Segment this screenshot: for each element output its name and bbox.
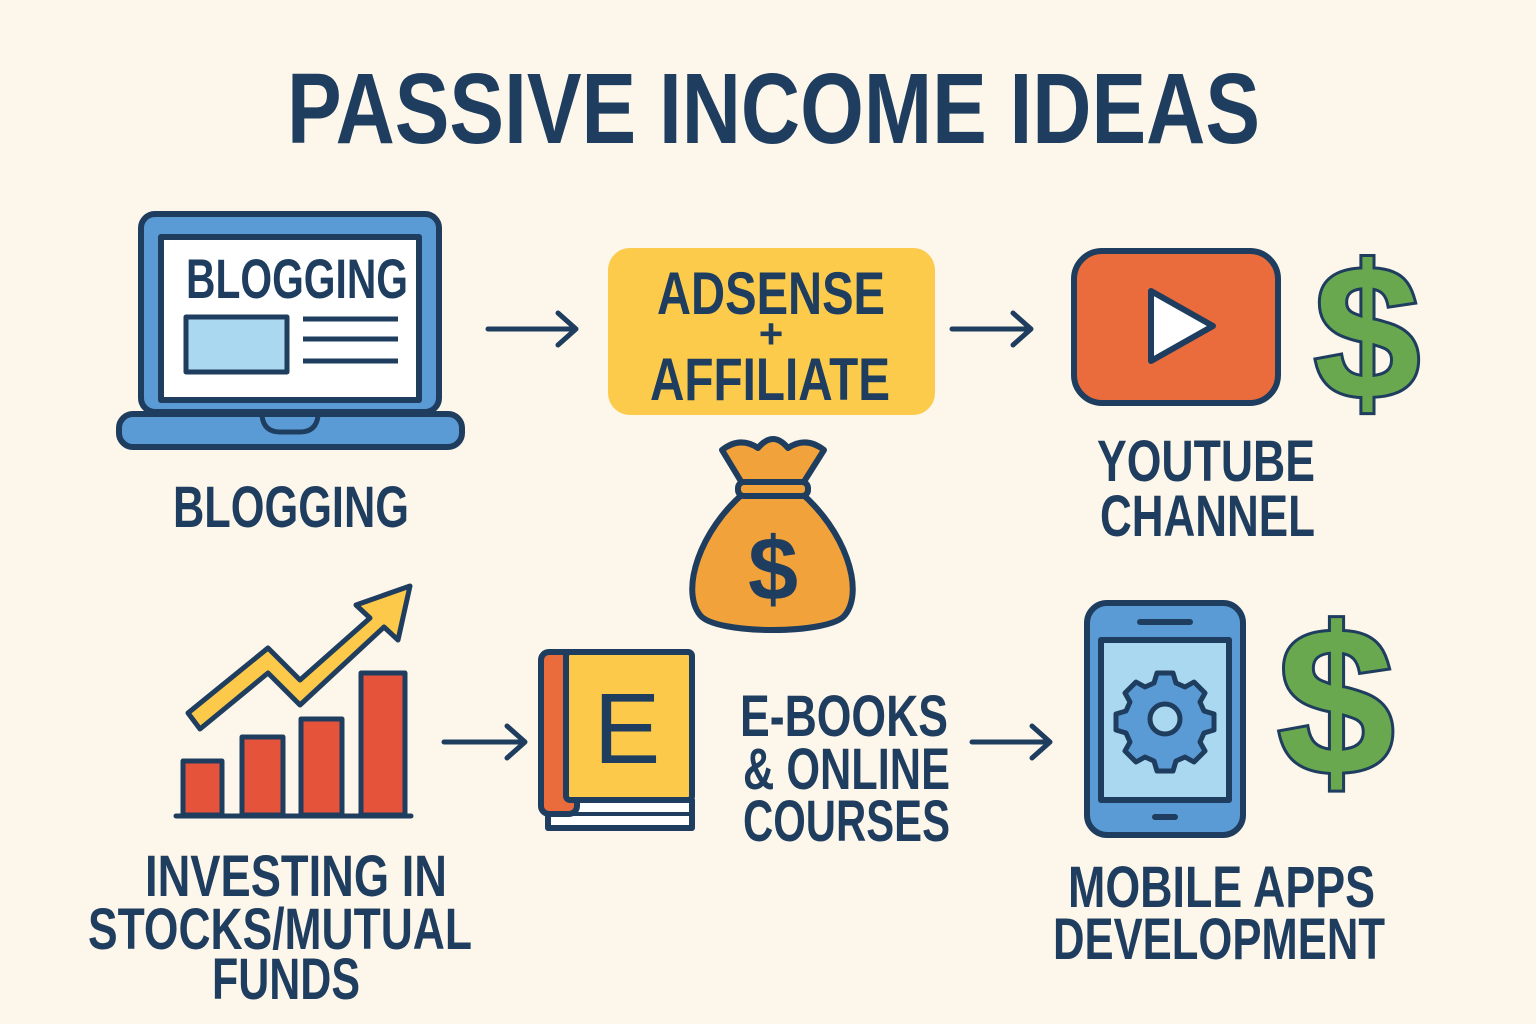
icon: money bag	[692, 439, 853, 630]
label: investing: INVESTING IN	[145, 844, 447, 909]
label: youtube channel: CHANNEL	[1100, 484, 1315, 549]
icon: e-book: E	[594, 673, 660, 785]
title: PASSIVE INCOME IDEAS	[287, 53, 1260, 165]
icon: phone with gear	[1087, 603, 1243, 835]
arrow 4	[972, 726, 1050, 758]
label: e-books: COURSES	[743, 789, 950, 854]
label: investing	[88, 844, 472, 1012]
icon: dollar 1: $	[1314, 227, 1420, 439]
icon: e-book	[541, 652, 692, 828]
label: youtube channel	[1097, 429, 1315, 549]
label: investing: FUNDS	[212, 947, 360, 1012]
label: youtube channel: YOUTUBE	[1097, 429, 1315, 494]
box: adsense + affiliate: AFFILIATE	[650, 346, 890, 413]
label: e-books: & ONLINE	[743, 737, 950, 802]
icon: youtube play	[1074, 251, 1278, 403]
icon: laptop	[119, 214, 462, 447]
box: adsense + affiliate	[608, 248, 935, 415]
label: mobile apps: DEVELOPMENT	[1053, 907, 1385, 972]
arrow 1	[488, 313, 576, 345]
icon: laptop: BLOGGING	[186, 247, 408, 310]
box: adsense + affiliate: +	[759, 310, 783, 357]
label: mobile apps: MOBILE APPS	[1068, 855, 1375, 920]
arrow 3	[444, 726, 525, 758]
label: investing: STOCKS/MUTUAL	[88, 897, 472, 962]
icon: money bag: $	[748, 520, 798, 620]
label: blogging: BLOGGING	[173, 475, 409, 540]
label: mobile apps	[1053, 855, 1385, 972]
icon: dollar 2: $	[1278, 584, 1394, 819]
chart: investing	[176, 586, 411, 816]
box: adsense + affiliate: ADSENSE	[657, 260, 885, 327]
label: e-books: E-BOOKS	[740, 684, 948, 749]
arrow 2	[952, 313, 1031, 345]
label: e-books	[740, 684, 950, 854]
